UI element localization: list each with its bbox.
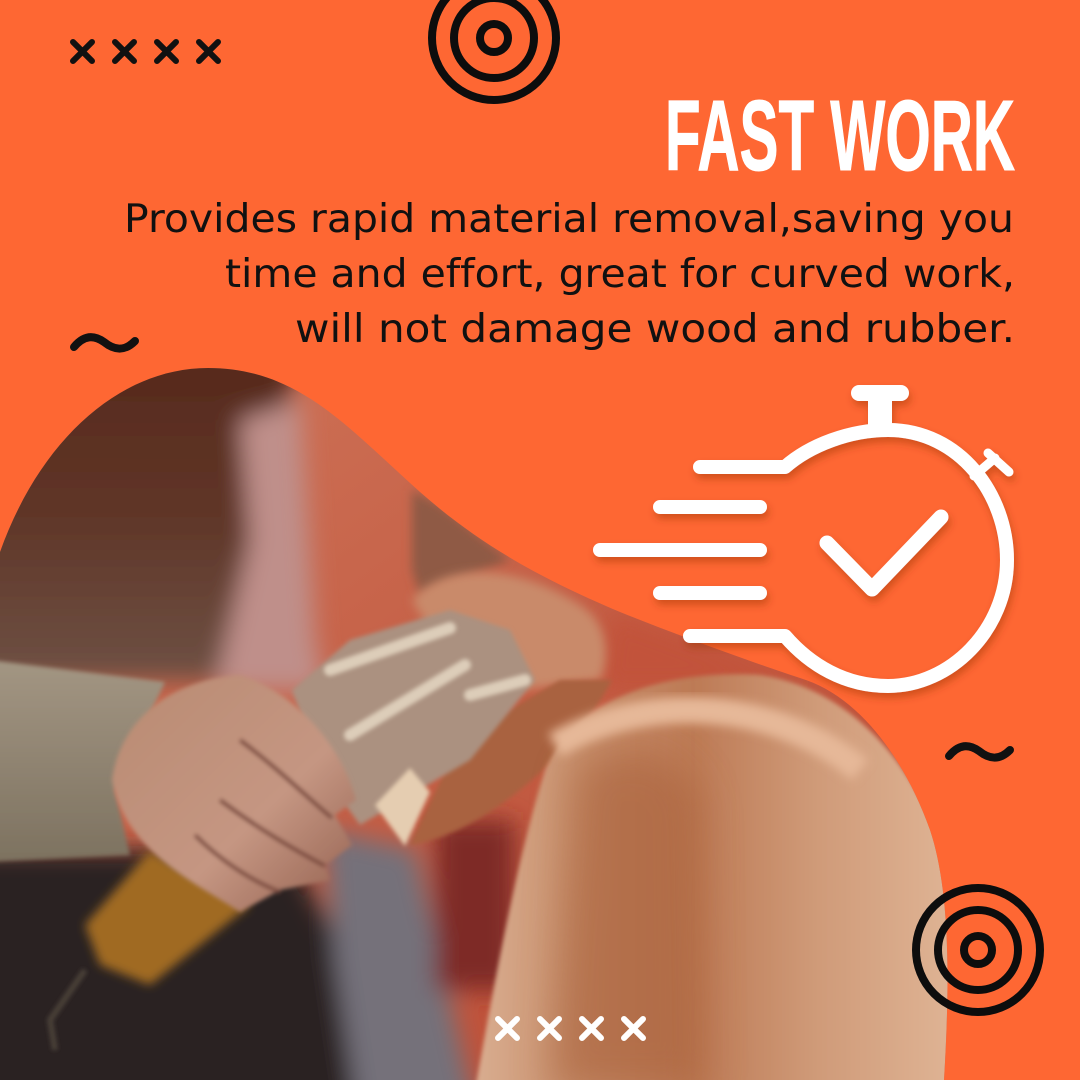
description text: will not damage wood and rubber. (295, 307, 1015, 352)
icon: stopwatch with check mark (600, 393, 1009, 686)
decoration: bottom target (916, 888, 1040, 1012)
grinder guard tab (375, 768, 430, 846)
far hand (412, 572, 606, 690)
torso and apron (0, 368, 692, 1080)
description text: Provides rapid material removal,saving you (124, 197, 1014, 242)
description text (124, 197, 1015, 352)
decoration: left squiggle (74, 337, 135, 349)
grinder body (292, 610, 535, 825)
wood block (475, 674, 960, 1080)
decoration: bottom x marks (498, 1019, 643, 1038)
sleeve (0, 660, 165, 862)
grinder disc (410, 680, 612, 845)
description text: time and effort, great for curved work, (225, 252, 1015, 297)
main hand (112, 675, 356, 912)
decoration: top target (432, 0, 556, 100)
decoration: right squiggle (949, 746, 1010, 758)
photo: woodworker using an angle grinder (0, 340, 960, 1080)
decoration: top x marks (73, 42, 218, 61)
grinder handle (85, 850, 250, 985)
far arm (412, 490, 510, 595)
